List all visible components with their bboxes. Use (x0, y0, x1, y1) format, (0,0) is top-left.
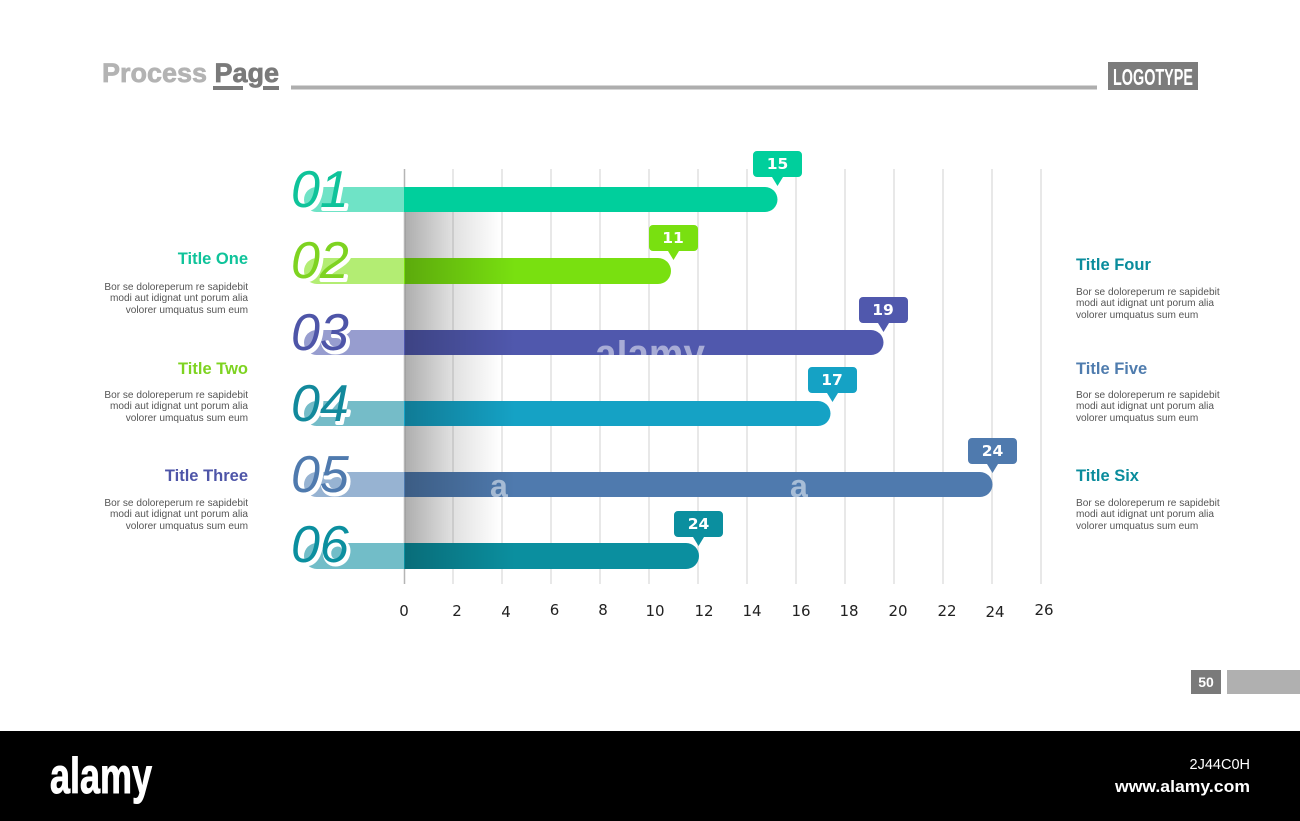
axis labels: 12 (694, 602, 714, 620)
callout 19 (859, 297, 908, 332)
text: title three (104, 467, 248, 532)
axis labels: 14 (742, 602, 762, 620)
row 05 (293, 456, 992, 497)
row 06: 06 (293, 518, 351, 576)
axis labels: 20 (888, 602, 908, 620)
text: title two (104, 360, 248, 424)
text: title four: Bor se doloreperum re sapidebit (1076, 287, 1220, 298)
row 03: alamy (595, 330, 706, 377)
logotype: LOGOTYPE (1113, 64, 1193, 90)
axis labels: 18 (839, 602, 859, 620)
title: Process Page (102, 58, 279, 88)
callout 19: 19 (872, 301, 894, 319)
title underline (213, 86, 243, 90)
axis labels (399, 601, 1054, 621)
text: title six (1076, 467, 1220, 532)
row 02 (291, 232, 671, 292)
text: title three: volorer umquatus sum eum (126, 521, 248, 532)
header rule (291, 86, 1097, 90)
text: title five: Bor se doloreperum re sapidebit (1076, 390, 1220, 401)
text: title six: modi aut idignat unt porum alia (1076, 509, 1214, 520)
callout 24 top (968, 438, 1017, 473)
axis labels: 8 (598, 601, 608, 619)
callout 24 top: 24 (982, 442, 1003, 460)
callout 11: 11 (662, 229, 684, 247)
row 05: a (790, 468, 808, 504)
text: title four: volorer umquatus sum eum (1076, 310, 1198, 321)
row 05: 05 (293, 448, 352, 506)
text: title one: Title One (178, 250, 248, 268)
watermark band (0, 731, 1300, 821)
callout 24 bottom: 24 (688, 515, 709, 533)
axis labels: 10 (645, 602, 665, 620)
callout 24 bottom (674, 511, 723, 546)
axis labels: 2 (452, 602, 462, 620)
bar chart (291, 151, 1054, 621)
text: title two: Title Two (178, 360, 248, 378)
site url: www.alamy.com (1114, 777, 1250, 796)
row 03: 03 (291, 304, 349, 362)
callout 15 (753, 151, 802, 186)
image id: 2J44C0H (1190, 757, 1250, 773)
text: title one: Bor se doloreperum re sapidebit (104, 282, 248, 293)
logotype (1108, 62, 1198, 90)
text: title four: modi aut idignat unt porum alia (1076, 298, 1214, 309)
row 01: 01 (291, 161, 349, 219)
title underline end (263, 86, 279, 90)
text: title two: modi aut idignat unt porum alia (110, 401, 248, 412)
axis labels: 22 (937, 602, 957, 620)
header (102, 58, 1198, 90)
text: title three: Bor se doloreperum re sapidebit (104, 498, 248, 509)
text: title two: volorer umquatus sum eum (126, 413, 248, 424)
axis labels: 0 (399, 602, 409, 620)
text: title one: volorer umquatus sum eum (126, 305, 248, 316)
shadow band (405, 212, 501, 543)
footer bar (1227, 670, 1300, 694)
row 06 (291, 516, 699, 576)
row 05: a (490, 468, 508, 504)
axis labels: 26 (1034, 601, 1054, 619)
axis labels: 6 (550, 601, 559, 619)
callout 15: 15 (767, 155, 788, 173)
row 04: 04 (291, 375, 349, 433)
row 05: 05 (291, 446, 350, 504)
text: title six: Title Six (1076, 467, 1140, 485)
page number: 50 (1198, 674, 1214, 690)
text: title four (1076, 256, 1220, 321)
axis labels: 4 (501, 603, 511, 621)
text: title four: Title Four (1076, 256, 1151, 274)
axis labels: 24 (985, 603, 1005, 621)
text: title five: Title Five (1076, 360, 1147, 378)
row 04 (291, 375, 830, 435)
callout 17: 17 (821, 371, 843, 389)
row 06: 06 (291, 516, 349, 574)
right text blocks (1076, 256, 1220, 532)
axis labels: 16 (791, 602, 811, 620)
row 01: 01 (293, 163, 351, 221)
row 03: 03 (293, 306, 351, 364)
row 03 (293, 314, 884, 355)
page number (1191, 670, 1221, 694)
text: title two: Bor se doloreperum re sapidebit (104, 390, 248, 401)
row 01 (291, 161, 777, 221)
text: title five: volorer umquatus sum eum (1076, 413, 1198, 424)
text: title five: modi aut idignat unt porum alia (1076, 401, 1214, 412)
row 02: 02 (293, 234, 351, 292)
row 02: 02 (291, 232, 349, 290)
text: title one (104, 250, 248, 316)
alamy logo text: alamy (50, 748, 152, 804)
row 04: 04 (293, 377, 351, 435)
left text blocks (104, 250, 248, 532)
callout 11 (649, 225, 698, 260)
text: title three: Title Three (165, 467, 248, 485)
text: title six: volorer umquatus sum eum (1076, 521, 1198, 532)
text: title three: modi aut idignat unt porum alia (110, 509, 248, 520)
text: title six: Bor se doloreperum re sapidebit (1076, 498, 1220, 509)
callout 17 (808, 367, 857, 402)
text: title five (1076, 360, 1220, 424)
text: title one: modi aut idignat unt porum alia (110, 293, 248, 304)
